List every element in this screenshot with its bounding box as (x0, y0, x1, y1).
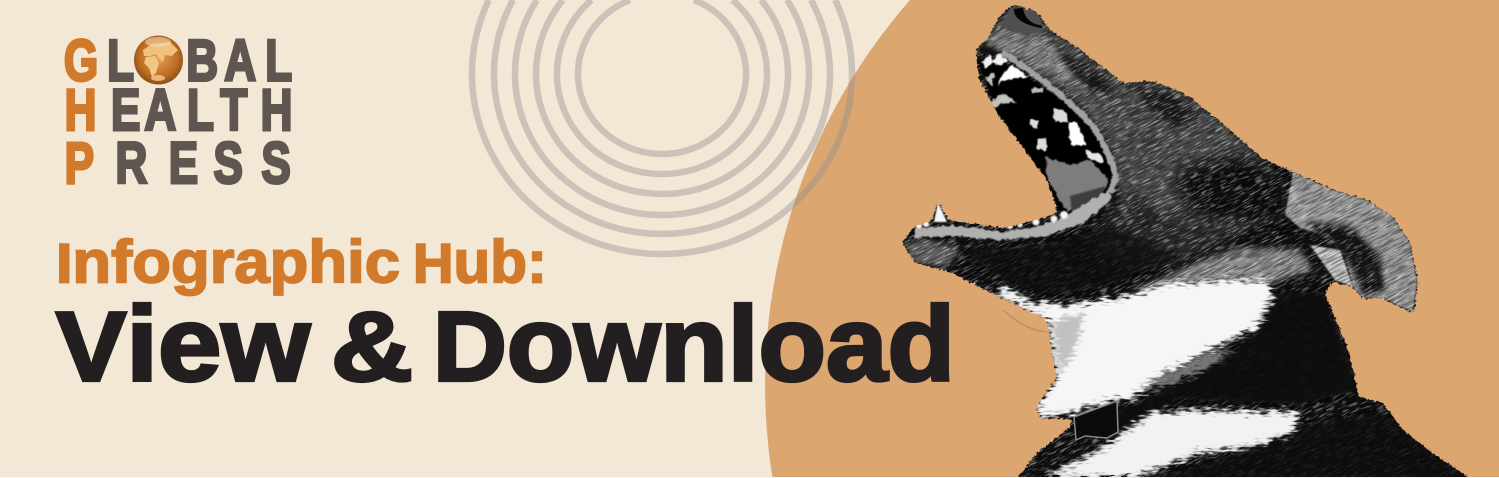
logo: Global Health Press (64, 28, 293, 195)
dog ear base highlight (1310, 245, 1353, 287)
icon: globe (134, 36, 183, 84)
logo: Global Health Press: H (65, 77, 96, 142)
dog cheek fur (1090, 190, 1240, 265)
edge highlight (0, 477, 1499, 478)
logo: Global Health Press: G (64, 28, 98, 93)
dog black neck shadow (1075, 290, 1360, 440)
heading: View & Download: View (56, 286, 311, 404)
heading: Infographic Hub: Hub: (413, 228, 547, 296)
dog throat grey fringe (1052, 312, 1085, 375)
dog lower white stripe (1043, 410, 1300, 478)
dog photo (890, 0, 1499, 478)
dog palate (1045, 157, 1108, 212)
dog black body shadow (1140, 410, 1480, 478)
logo: Global Health Press: P (65, 130, 94, 195)
dog base (890, 0, 1499, 478)
dog black throat shadow (960, 225, 1180, 295)
heading: View & Download: & (331, 292, 413, 402)
logo: Global Health Press: EALTH (111, 77, 293, 142)
dog chest grey fringe (1140, 350, 1232, 388)
dog fur texture (890, 0, 1499, 478)
dog white chest (1000, 280, 1273, 418)
dog neck grey band (1130, 248, 1312, 292)
dog collar buckle (1074, 401, 1118, 440)
dog lower teeth (916, 202, 1068, 229)
concentric rings (472, 0, 852, 254)
dog ear (1285, 172, 1417, 312)
orange circle (765, 0, 1499, 478)
dog snout highlight (985, 28, 1090, 90)
dog dark head patches (1060, 52, 1118, 95)
dog upper lip band (1002, 52, 1116, 193)
dog lower jaw (915, 190, 1112, 240)
heading: View & Download (56, 286, 955, 404)
logo: Global Health Press: RESS (116, 130, 291, 195)
heading: Infographic Hub: Infographic (56, 228, 400, 296)
dog whisker (1003, 310, 1047, 332)
logo: Global Health Press: LOBAL (107, 28, 292, 93)
dog ear inner shadow (1305, 222, 1385, 296)
dog upper teeth (982, 53, 1104, 163)
dog jaw underside (903, 240, 960, 268)
heading: View & Download: Download (433, 286, 955, 404)
dog nose (1000, 6, 1044, 34)
heading: Infographic Hub (56, 228, 547, 296)
dog head fur (985, 6, 1285, 240)
dog mouth interior (978, 60, 1115, 218)
